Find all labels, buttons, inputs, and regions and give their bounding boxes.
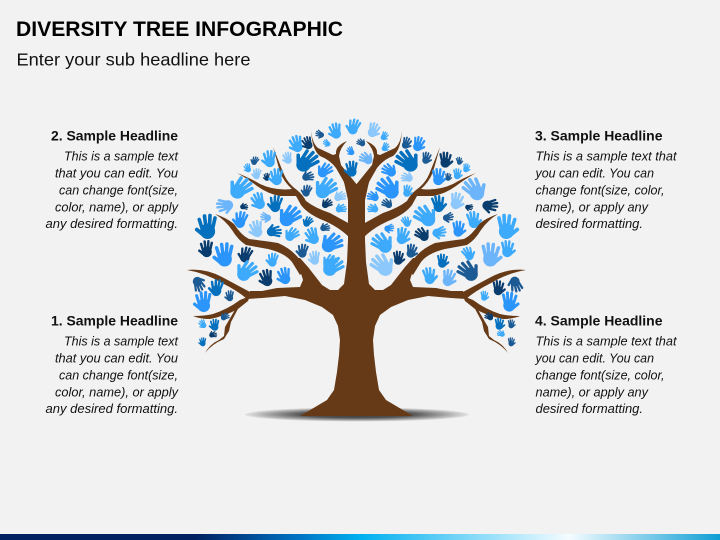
text block: 2. Sample Headline: This is a sample text xyxy=(64,150,179,164)
text block: 1. Sample Headline xyxy=(46,313,179,416)
text block: 2. Sample Headline: any desired formatting. xyxy=(46,217,178,231)
text block: 4. Sample Headline: This is a sample text that xyxy=(536,335,677,349)
text block: 2. Sample Headline xyxy=(46,128,179,231)
text block: 3. Sample Headline: 3. Sample Headline xyxy=(535,128,663,144)
title: DIVERSITY TREE INFOGRAPHIC xyxy=(16,17,343,41)
text block: 4. Sample Headline: name), or apply any xyxy=(536,385,649,399)
text block: 3. Sample Headline xyxy=(535,128,677,231)
text block: 4. Sample Headline xyxy=(535,313,677,416)
text block: 4. Sample Headline: change font(size, color, xyxy=(536,368,664,382)
hand leaves: left side of the crown xyxy=(192,118,361,346)
text block: 1. Sample Headline: 1. Sample Headline xyxy=(51,313,178,329)
tree trunk and branches xyxy=(187,130,526,416)
text block: 3. Sample Headline: name), or apply any xyxy=(536,200,649,214)
text block: 2. Sample Headline: 2. Sample Headline xyxy=(51,128,178,144)
text block: 4. Sample Headline: 4. Sample Headline xyxy=(535,313,663,329)
text block: 3. Sample Headline: you can edit. You can xyxy=(535,166,654,180)
bottom gradient bar xyxy=(0,534,720,540)
subtitle: Enter your sub headline here xyxy=(16,50,250,70)
text block: 2. Sample Headline: can change font(size, xyxy=(59,184,178,198)
text block: 1. Sample Headline: color, name), or apply xyxy=(55,385,179,399)
ground shadow xyxy=(245,408,469,422)
text block: 2. Sample Headline: color, name), or apply xyxy=(55,200,179,214)
text block: 1. Sample Headline: can change font(size, xyxy=(59,368,178,382)
text block: 4. Sample Headline: you can edit. You can xyxy=(535,352,654,366)
text block: 1. Sample Headline: any desired formatting. xyxy=(46,402,178,416)
text block: 4. Sample Headline: desired formatting. xyxy=(536,402,643,416)
text block: 1. Sample Headline: that you can edit. You xyxy=(55,352,178,366)
text block: 3. Sample Headline: This is a sample text that xyxy=(536,150,677,164)
text block: 3. Sample Headline: change font(size, color, xyxy=(536,184,664,198)
hand leaves: right side of the crown xyxy=(356,122,523,346)
text block: 3. Sample Headline: desired formatting. xyxy=(536,217,643,231)
text block: 2. Sample Headline: that you can edit. You xyxy=(55,166,178,180)
text block: 1. Sample Headline: This is a sample text xyxy=(64,335,179,349)
